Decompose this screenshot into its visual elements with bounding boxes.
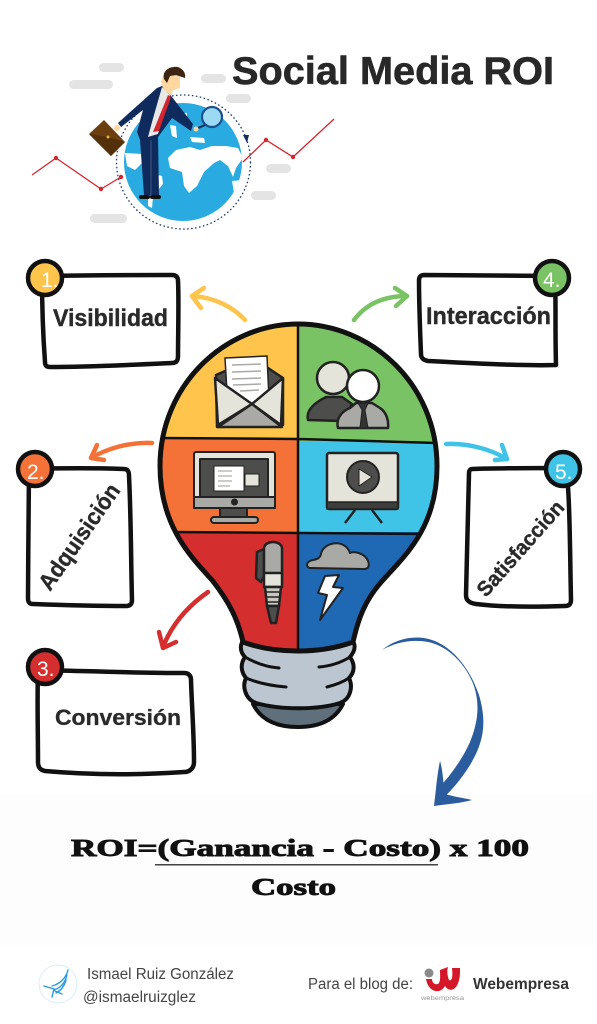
icon: author avatar (39, 965, 77, 1003)
arrow: blue curved to formula (382, 638, 483, 806)
formula: ROI: ROI=(Ganancia - Costo) x 100 (71, 836, 529, 862)
icon: two people (308, 362, 388, 428)
logo: webempresa (420, 967, 465, 1002)
panel: adquisición: Adquisición (33, 478, 125, 595)
arrow: red (159, 592, 208, 648)
footer: author: @ismaelruizglez (83, 989, 196, 1006)
panel: conversión (28, 650, 194, 774)
footer: blog credit (308, 967, 569, 1002)
icon: businessman (114, 67, 193, 199)
panel: adquisición (18, 452, 132, 606)
arrow: green (354, 288, 407, 320)
icon: storm cloud (307, 543, 369, 620)
arrow: yellow (192, 288, 245, 320)
panel: adquisición: 2. (27, 461, 45, 484)
illustration: light bulb (150, 320, 449, 727)
icon: pen (256, 542, 282, 623)
panel: satisfacción: 5. (555, 461, 573, 484)
title: Social Media ROI (232, 50, 554, 93)
formula: ROI: Costo (251, 875, 336, 901)
panel: interacción (419, 261, 569, 365)
panel: visibilidad: 1. (41, 269, 59, 292)
footer: author (39, 965, 234, 1006)
panel: satisfacción: Satisfacción (473, 496, 569, 601)
bulb outline (160, 324, 437, 651)
panel: visibilidad: Visibilidad (53, 305, 168, 332)
bulb screw base (241, 638, 355, 727)
footer: blog credit: Para el blog de: (308, 976, 413, 993)
icon: envelope (215, 356, 283, 427)
panel: conversión: Conversión (55, 705, 181, 730)
arrow: light blue (446, 444, 507, 460)
icon: desktop monitor (194, 452, 275, 523)
formula: ROI (71, 836, 529, 901)
logo: webempresa: webempresa (420, 996, 465, 1002)
illustration: businessman with globe and trend line (32, 63, 334, 229)
panel: satisfacción (466, 452, 580, 607)
icon: video presentation board (327, 453, 398, 523)
icon: briefcase (89, 120, 125, 156)
icon: magnifying glass (194, 107, 222, 132)
arrow: orange (91, 443, 152, 460)
panel: conversión: 3. (37, 658, 55, 681)
panel: visibilidad (28, 261, 178, 367)
panel: interacción: 4. (543, 269, 561, 292)
bulb quadrants (162, 326, 434, 648)
panel: interacción: Interacción (426, 303, 551, 330)
footer: blog credit: Webempresa (473, 976, 569, 993)
footer: author: Ismael Ruiz González (87, 966, 234, 983)
